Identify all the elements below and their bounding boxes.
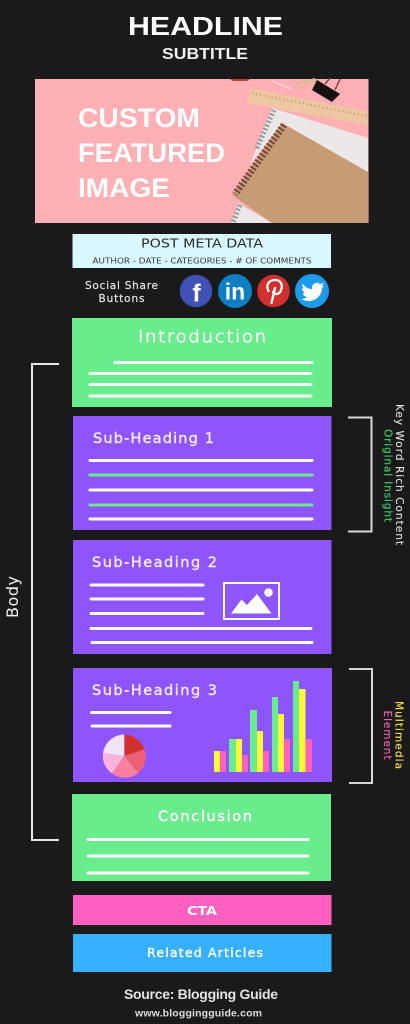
panel: sub-heading 3 [73, 668, 332, 782]
label: key word rich content: Key Word Rich Content [393, 404, 405, 545]
icon: linkedin [218, 274, 252, 308]
panel: post meta data: AUTHOR - DATE - CATEGORIES - # OF COMMENTS [92, 256, 312, 266]
panel: related articles: Related Articles [147, 945, 263, 960]
panel: introduction [72, 318, 332, 407]
icon: ruler [248, 88, 368, 125]
panel: sub-heading 1 [73, 416, 332, 530]
panel: post meta data: POST META DATA [141, 236, 264, 250]
title: HEADLINE [128, 11, 283, 41]
featured image text: IMAGE [78, 173, 170, 203]
icon: pinterest [257, 275, 290, 307]
panel: sub-heading 3: Sub-Heading 3 [92, 683, 217, 699]
icon: pencils and clips [230, 78, 340, 102]
featured image text: FEATURED [78, 138, 225, 168]
right bracket: keyword content [348, 418, 372, 532]
label: element: Element [381, 710, 393, 760]
bar chart [214, 681, 312, 772]
panel: CTA [73, 895, 332, 925]
icon: facebook [180, 275, 212, 308]
label: original insight: Original Insight [382, 429, 394, 522]
icon: white paper [232, 108, 368, 223]
icon: image placeholder [224, 583, 279, 619]
icon: linkedin: in [225, 278, 245, 304]
panel: introduction: Introduction [138, 326, 266, 348]
subtitle: SUBTITLE [162, 46, 248, 63]
panel: sub-heading 2: Sub-Heading 2 [92, 555, 217, 571]
social share label: Buttons [98, 293, 144, 305]
panel: conclusion [72, 794, 331, 881]
panel: conclusion: Conclusion [158, 809, 252, 825]
social share label [85, 280, 158, 305]
social share label: Social Share [85, 280, 158, 292]
panel: sub-heading 2 [73, 540, 332, 654]
website: www.bloggingguide.com [134, 1008, 262, 1020]
icon: facebook: f [192, 280, 201, 308]
left bracket: body [32, 364, 59, 840]
source: Source: Blogging Guide [124, 986, 278, 1002]
featured image text [78, 103, 225, 203]
icon: twitter [295, 274, 329, 308]
body label: Body [3, 576, 22, 618]
label: multimedia: Multimedia [392, 701, 404, 769]
panel: related articles [73, 934, 332, 972]
right bracket: multimedia [349, 669, 372, 783]
featured image text: CUSTOM [78, 103, 200, 133]
panel: custom featured image [35, 78, 368, 223]
icon: kraft notebook [232, 123, 368, 223]
panel: sub-heading 1: Sub-Heading 1 [93, 431, 214, 447]
pie chart [103, 734, 146, 778]
panel: post meta data [72, 234, 331, 268]
panel: CTA: CTA [187, 903, 217, 918]
